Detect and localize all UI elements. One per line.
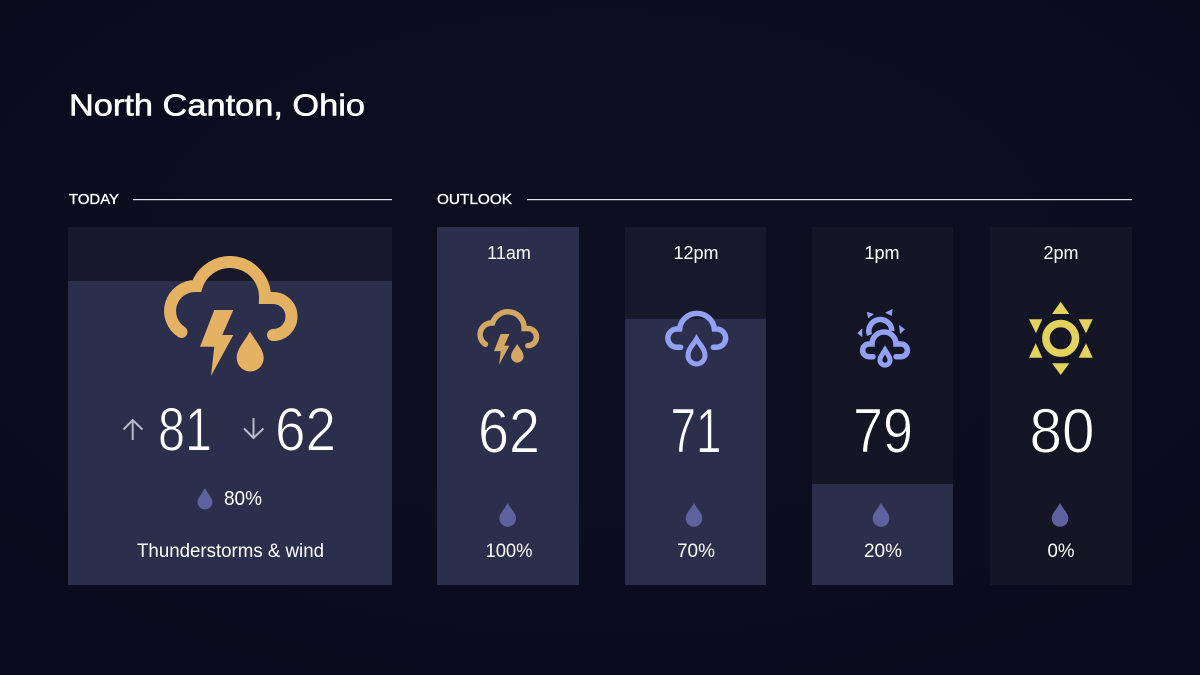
condition text: Thunderstorms & wind [137,541,324,562]
icon: thunderstorm with rain [480,312,536,365]
temperature: 71 [670,396,722,466]
precipitation chance: 100% [486,541,533,562]
section header: today: TODAY [69,192,119,208]
section header: outlook: OUTLOOK [437,192,512,208]
icon: drop [686,503,702,527]
temperature: 80 [1030,396,1094,466]
icon: sun [1029,302,1093,375]
high temperature: 81 [158,396,212,464]
icon: drop [1052,503,1068,527]
precipitation chance: 70% [677,541,715,562]
panel: 11am [437,227,579,585]
panel: 12pm [625,227,766,585]
icon: drop [499,503,516,527]
low temperature [244,396,336,464]
low temperature: 62 [275,396,336,464]
precipitation chance: 20% [864,541,902,562]
time label: 2pm [1043,243,1079,263]
time label: 1pm [864,243,900,263]
time label: 11am [487,243,531,263]
temperature: 79 [853,396,913,466]
temperature: 62 [478,396,540,466]
panel: 2pm [990,227,1132,585]
time label: 12pm [673,243,719,263]
precipitation chance: 80% [224,488,262,510]
precipitation chance [198,488,262,510]
high temperature [124,396,212,464]
title: North Canton, Ohio [69,88,365,122]
panel: today [68,227,392,585]
icon: partly sunny with rain [857,309,907,365]
precipitation chance: 0% [1048,541,1075,562]
panel: 1pm [812,227,953,585]
icon: thunderstorm with rain [170,262,292,376]
icon: drop [873,503,889,527]
icon: cloud with rain [668,313,726,364]
